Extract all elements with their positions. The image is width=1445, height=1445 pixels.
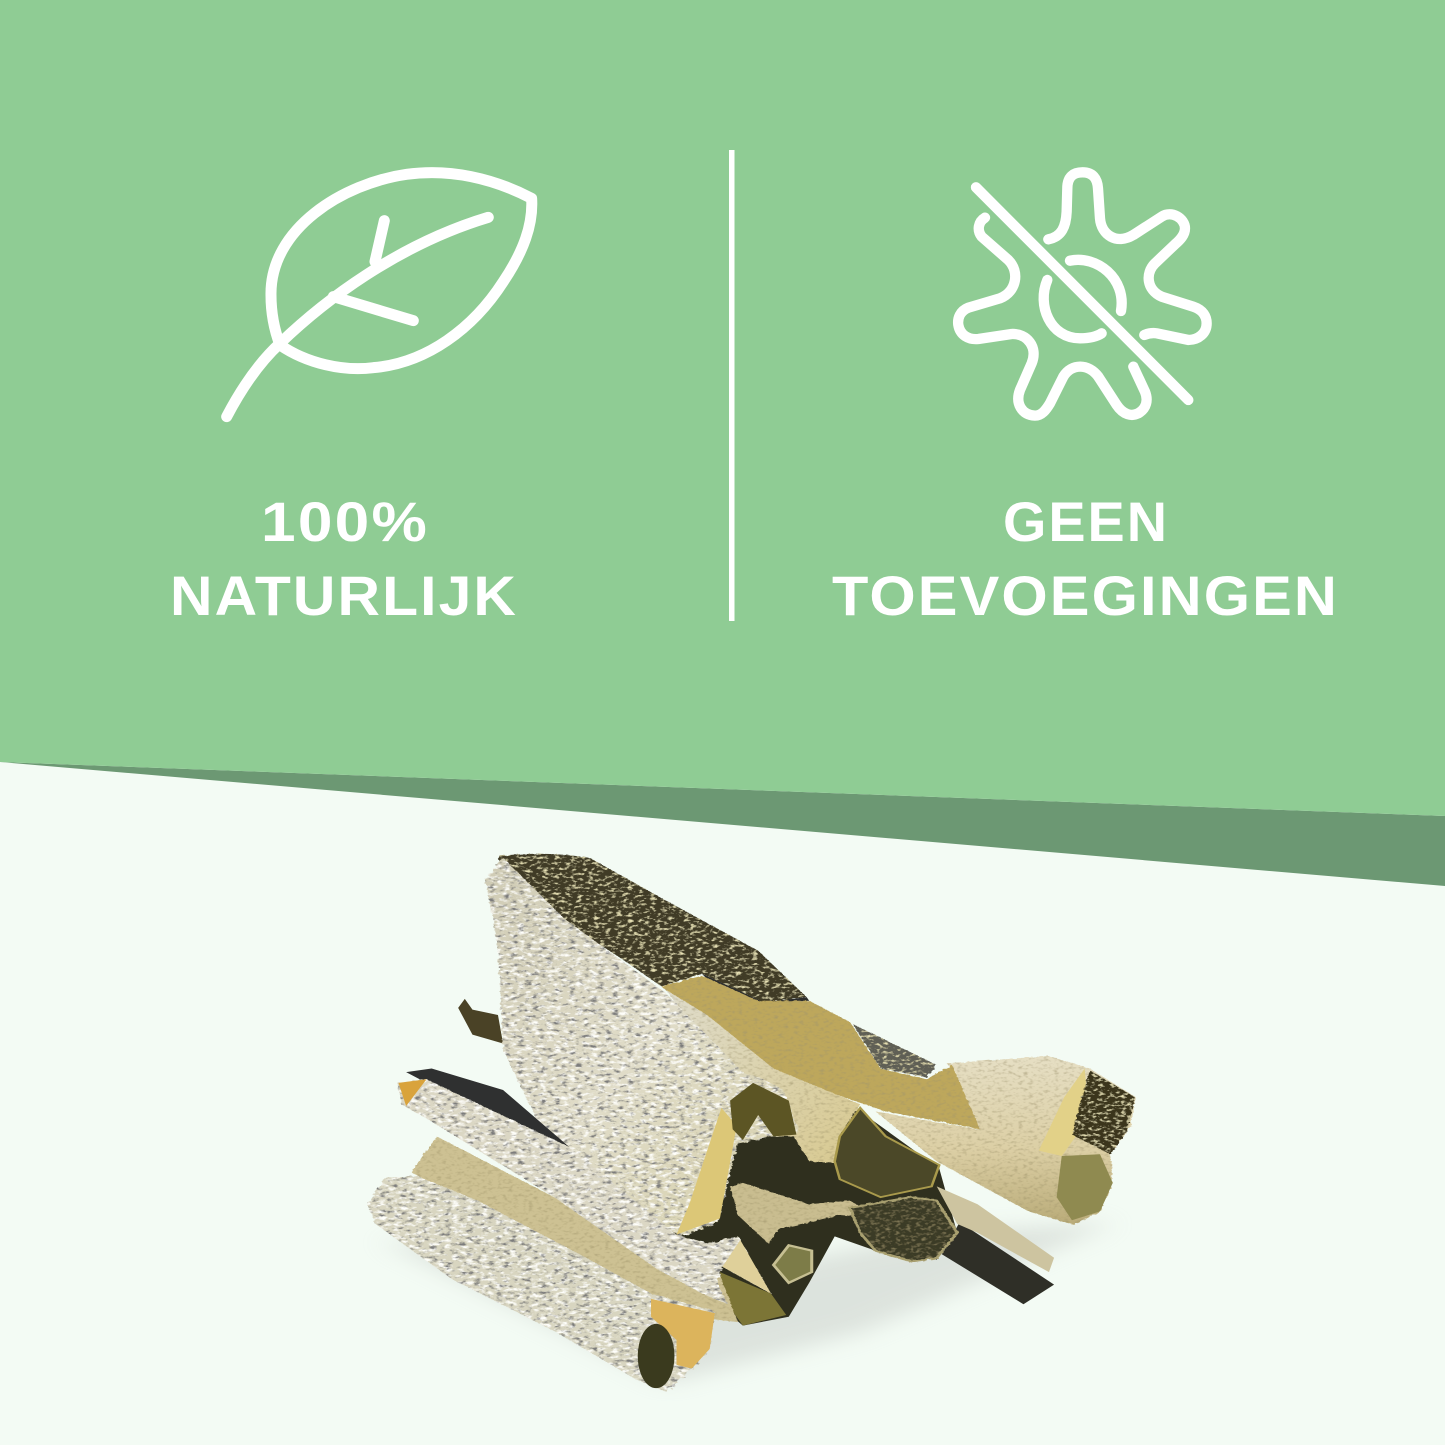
spiral curl	[773, 1245, 812, 1283]
shadow	[381, 1222, 1115, 1383]
back stick with cream top	[942, 1222, 1054, 1304]
right curl	[850, 1197, 957, 1261]
label: geen toevoegingen	[832, 490, 1339, 627]
small back stick	[458, 999, 503, 1044]
big front roll	[485, 858, 799, 1236]
dark curls	[835, 1108, 939, 1197]
label: 100% naturlijk: 100%	[261, 490, 429, 553]
label: 100% naturlijk: NATURLIJK	[170, 564, 518, 627]
icon: leaf	[227, 173, 532, 417]
yellow flap	[661, 976, 980, 1129]
cream roll	[666, 990, 860, 1163]
icon: crossed-out sun	[958, 172, 1207, 416]
green top panel	[0, 0, 1445, 816]
front roll	[368, 1176, 715, 1392]
dark top of second roll	[406, 1069, 569, 1151]
dark inner of large roll	[498, 854, 807, 1002]
label: geen toevoegingen: TOEVOEGINGEN	[832, 564, 1339, 627]
label: geen toevoegingen: GEEN	[1003, 490, 1169, 553]
light strip	[730, 1183, 881, 1244]
label: 100% naturlijk	[170, 490, 518, 627]
right roll	[876, 1056, 1136, 1225]
dark green wedge	[0, 762, 1445, 886]
olive base of second roll	[720, 1272, 786, 1326]
divider	[729, 150, 734, 621]
dark base behind the middle	[666, 1069, 957, 1326]
product illustration: dried fish skin rolls	[368, 854, 1136, 1392]
second roll, grey	[398, 1079, 771, 1304]
beige third roll	[411, 1136, 738, 1322]
